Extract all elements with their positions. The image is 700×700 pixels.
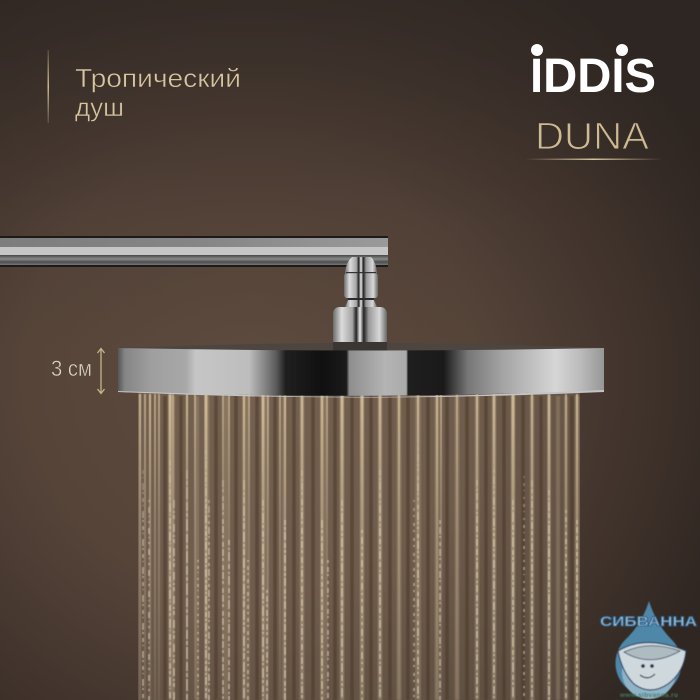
watermark: water drop bbox=[616, 601, 682, 696]
shower head: lower lip bbox=[118, 388, 604, 398]
shower head: top surface bbox=[119, 343, 604, 352]
shower head bbox=[118, 342, 604, 398]
water: bright upper streams bbox=[140, 394, 577, 700]
watermark: website: www.sibvanna.ru bbox=[619, 692, 678, 699]
water: wide soft streams bbox=[172, 396, 577, 700]
product name: DUNA: DUNA bbox=[535, 116, 650, 158]
swivel joint bbox=[344, 257, 378, 307]
watermark: drop inner tint bbox=[622, 645, 676, 699]
water: dark gaps bbox=[165, 396, 572, 700]
water: sparkling droplets bbox=[143, 440, 577, 700]
water stream bbox=[138, 392, 580, 700]
shower arm bbox=[0, 236, 388, 267]
shower head: cup base reflection bbox=[333, 342, 387, 351]
underline below product name bbox=[525, 158, 662, 160]
watermark: Sibvanna bbox=[600, 601, 697, 699]
watermark: face bbox=[640, 665, 655, 678]
accent line beside heading bbox=[48, 50, 49, 123]
dimension label: 3 cm: 3 см bbox=[51, 356, 92, 381]
dimension arrow bbox=[98, 348, 104, 394]
watermark: brand name: СИБВАННА bbox=[600, 613, 697, 629]
watermark: tub inner bbox=[624, 646, 680, 660]
shower head: front band bbox=[118, 348, 604, 396]
heading: tropical shower: душ bbox=[75, 92, 124, 122]
water: base sheet bbox=[138, 392, 580, 700]
watermark: bathtub bbox=[618, 642, 686, 690]
logo: iDDiS: IDDIS bbox=[530, 50, 656, 103]
mounting cup bbox=[333, 307, 387, 350]
heading: tropical shower: Тропический bbox=[75, 63, 241, 93]
